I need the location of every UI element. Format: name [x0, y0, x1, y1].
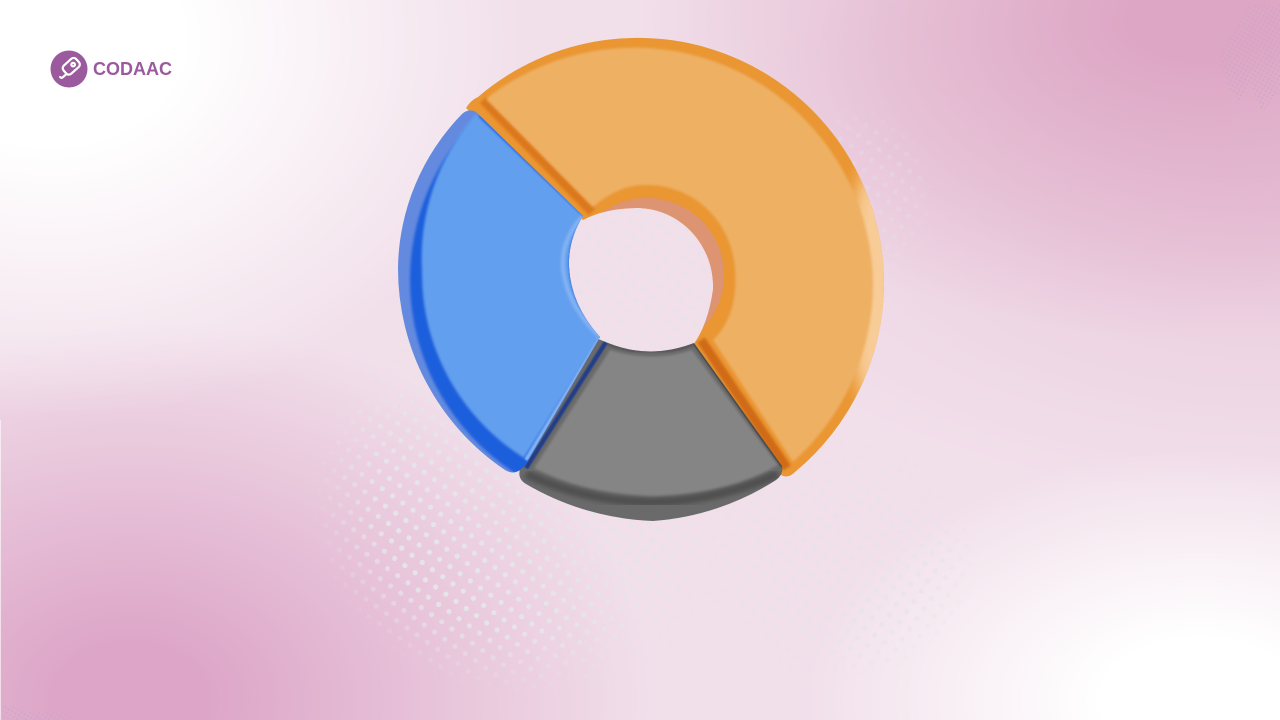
- texture patch: bottom left: [3, 706, 72, 720]
- segment: orange: [466, 38, 884, 476]
- donut chart: [398, 38, 884, 521]
- segment: grey: [519, 339, 782, 521]
- logo icon: [50, 50, 88, 88]
- halftone dot pattern: [332, 148, 938, 672]
- texture patch: top right: [1219, 5, 1280, 112]
- logo: [50, 50, 172, 88]
- segment: blue: [398, 110, 600, 472]
- logo wordmark: CODAAC: [93, 59, 172, 79]
- left edge strip: [0, 420, 1, 720]
